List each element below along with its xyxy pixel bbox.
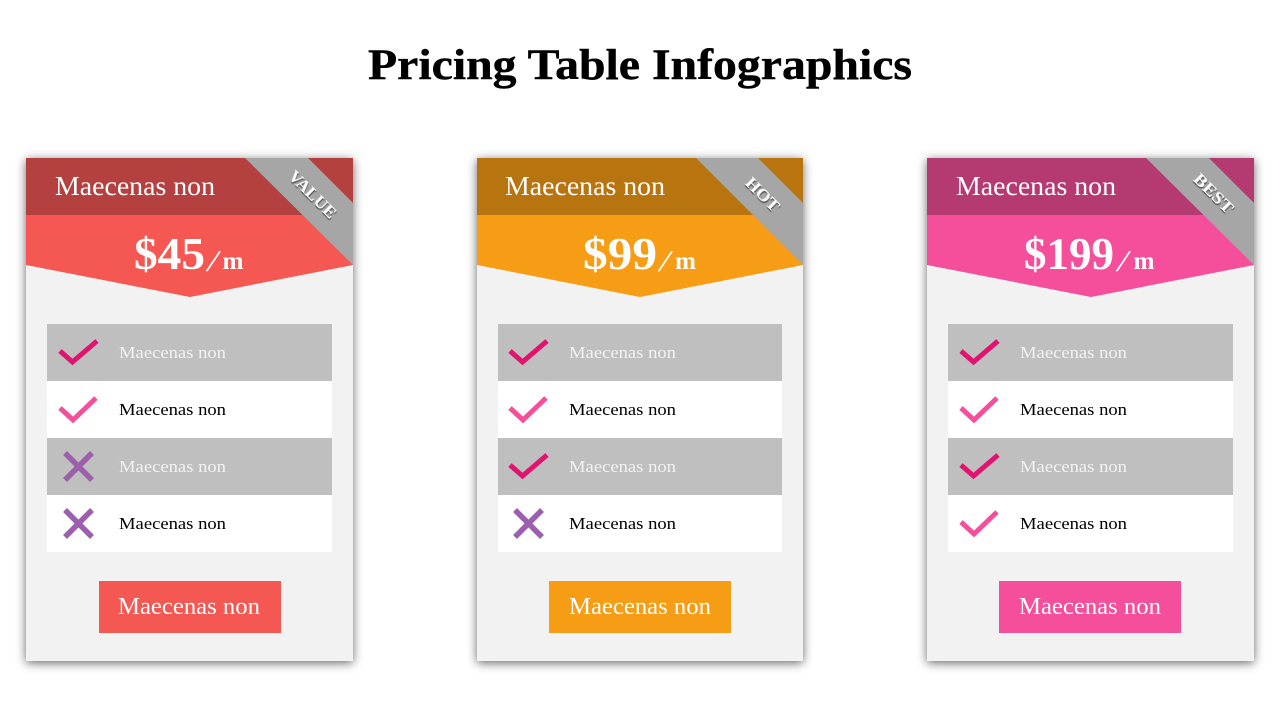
feature text: Maecenas non: [569, 457, 677, 476]
icon: check: [961, 512, 997, 534]
ribbon label: HOT: [741, 173, 784, 216]
ribbon label: BEST: [1190, 169, 1238, 218]
icon: check: [961, 398, 997, 420]
icon: check: [510, 455, 547, 476]
price banner: [477, 215, 803, 297]
icon: check: [961, 455, 998, 476]
icon: cross: [515, 510, 542, 537]
feature text: Maecenas non: [1020, 400, 1128, 419]
feature text: Maecenas non: [119, 400, 227, 419]
feature text: Maecenas non: [119, 457, 227, 476]
feature list: [498, 324, 782, 552]
card background: [26, 158, 353, 661]
icon: check: [961, 341, 998, 362]
price: m: [222, 248, 244, 275]
price: $99: [583, 229, 657, 279]
icon: check: [60, 341, 97, 362]
feature text: Maecenas non: [569, 343, 677, 362]
panel: value plan: [26, 158, 353, 661]
icon: check: [60, 398, 96, 420]
title: Pricing Table Infographics: [368, 42, 912, 89]
icon: check: [510, 398, 546, 420]
price banner: [927, 215, 1254, 297]
feature text: Maecenas non: [1020, 514, 1128, 533]
feature text: Maecenas non: [1020, 343, 1128, 362]
plan name: Maecenas non: [505, 171, 666, 201]
price: [583, 229, 696, 279]
price: [134, 229, 244, 279]
price: m: [1134, 248, 1155, 275]
card background: [927, 158, 1254, 661]
price banner: [26, 215, 353, 297]
button: [999, 581, 1181, 633]
ribbon label: VALUE: [285, 166, 341, 222]
ribbon: [245, 158, 353, 265]
card background: [477, 158, 803, 661]
header band: [26, 158, 353, 215]
icon: check: [510, 341, 547, 362]
panel: best plan: [927, 158, 1254, 661]
header band: [477, 158, 803, 215]
feature list: [47, 324, 332, 552]
button: Maecenas non: [118, 594, 260, 620]
icon: cross: [65, 453, 92, 480]
plan name: Maecenas non: [956, 171, 1117, 201]
feature text: Maecenas non: [1020, 457, 1128, 476]
price: $45: [134, 229, 205, 279]
price: /: [655, 245, 675, 278]
button: [99, 581, 281, 633]
header band: [927, 158, 1254, 215]
ribbon: [696, 158, 803, 265]
feature list: [948, 324, 1233, 552]
feature text: Maecenas non: [569, 400, 677, 419]
button: [549, 581, 731, 633]
price: /: [203, 245, 223, 278]
feature text: Maecenas non: [569, 514, 677, 533]
button: Maecenas non: [569, 594, 711, 620]
price: /: [1113, 245, 1133, 278]
price: m: [675, 248, 696, 275]
icon: cross: [65, 510, 92, 537]
ribbon: [1146, 158, 1254, 265]
feature text: Maecenas non: [119, 343, 227, 362]
feature text: Maecenas non: [119, 514, 227, 533]
price: $199: [1024, 229, 1114, 279]
price: [1024, 229, 1155, 279]
panel: hot plan: [477, 158, 803, 661]
button: Maecenas non: [1019, 594, 1161, 620]
plan name: Maecenas non: [55, 171, 216, 201]
